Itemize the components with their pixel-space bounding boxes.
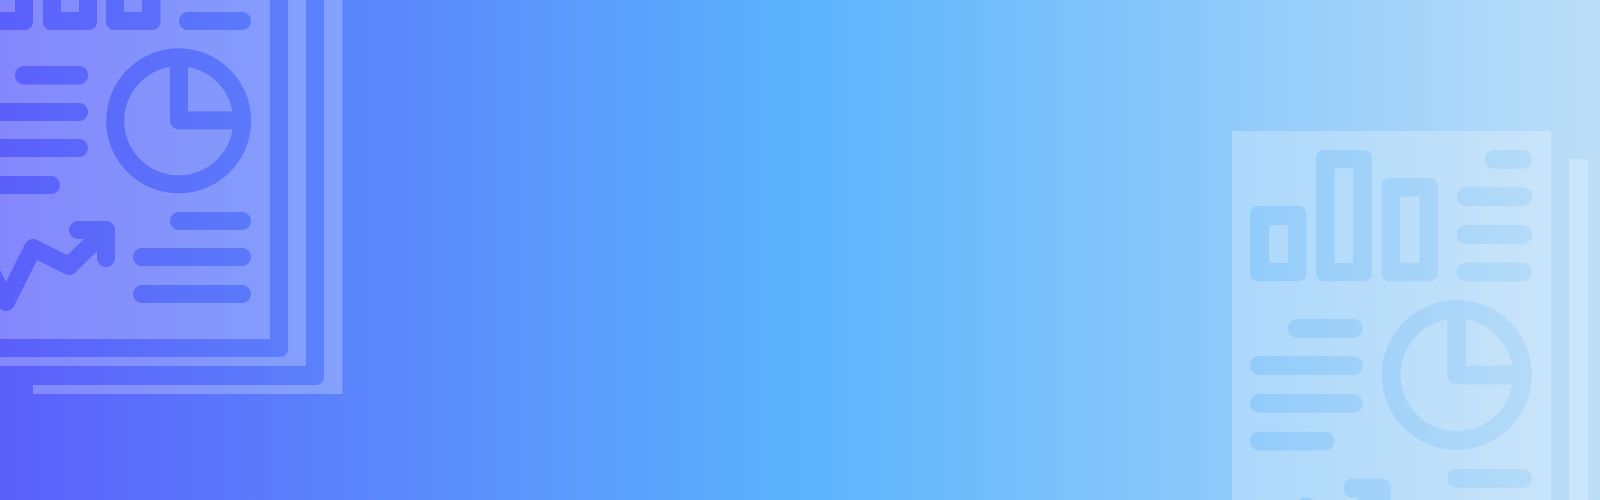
left pie chart [115, 57, 242, 184]
left bar chart [0, 0, 160, 30]
right bar chart [1250, 150, 1438, 281]
left page sheets [0, 0, 342, 394]
right trend arrow [1306, 488, 1382, 500]
left page edges [0, 0, 324, 385]
icon: report pages, right [1232, 131, 1588, 500]
right text lines lower [1250, 319, 1532, 488]
right page sheets [1232, 131, 1588, 500]
left text lines lower [133, 212, 251, 303]
icon: report pages, left [0, 0, 342, 394]
left trend arrow [0, 230, 106, 302]
right text lines upper [1457, 150, 1532, 281]
left text lines upper [0, 12, 251, 194]
right pie chart [1391, 309, 1522, 441]
